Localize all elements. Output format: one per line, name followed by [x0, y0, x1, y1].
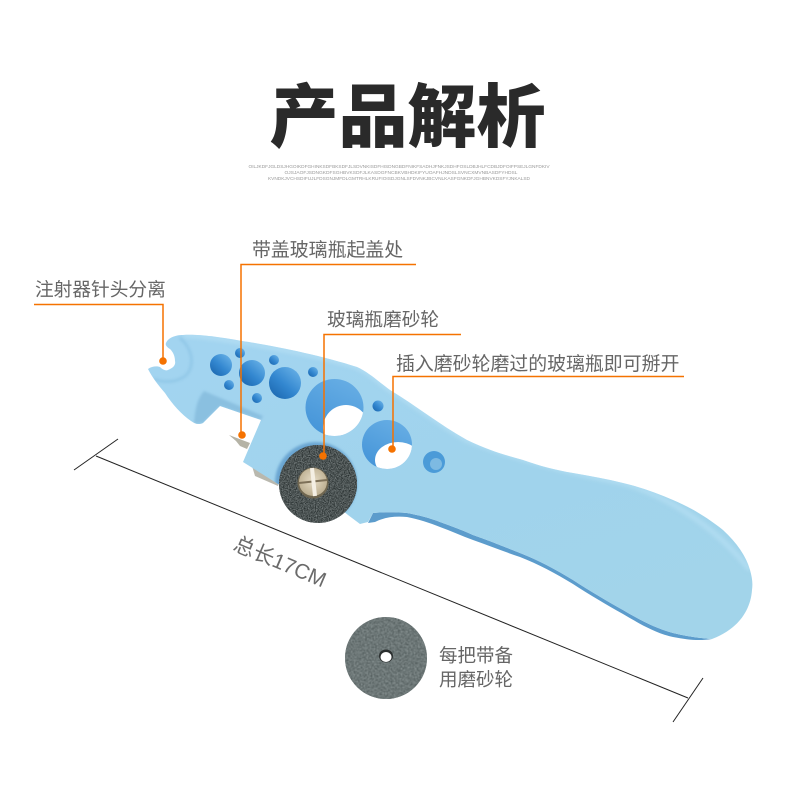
dimension label: 总长17CM: [230, 533, 329, 592]
socket shadow: [274, 441, 358, 513]
subtitle placeholder text: OILJKDFJGLDSJHGOIKDFGHINKSDFBKSDFJLSDVNKISDFHISDNGBDFNIKFSADHJFNKJSDHFOSLDBJHLFCDBJDFOIFPSEJLGNFDKIV: [248, 164, 550, 169]
callout: capped vial opener: 带盖玻璃瓶起盖处: [252, 239, 403, 261]
subtitle placeholder text: KVNDKJVCHSDIFUJLFDSGNJMFDLGMTRHLKRUFIOISDJGNLSFDVNKJBCVNLKASFGNKDFJGHBNVKDSFYJNKALSD: [268, 176, 531, 181]
underside shadow edge: [368, 512, 712, 640]
dimension line: total length: [74, 439, 703, 722]
callout: vial grinding wheel: 玻璃瓶磨砂轮: [327, 309, 439, 330]
callout: vial grinding wheel: [319, 309, 461, 460]
callout: needle separator: [34, 279, 167, 365]
callout: insert vial to snap open: 插入磨砂轮磨过的玻璃瓶即可掰开: [396, 353, 679, 375]
metal blade: [229, 435, 250, 449]
product: glass vial opener tool: [148, 335, 752, 640]
callout: insert vial to snap open: [388, 353, 684, 453]
grey lower blade: [252, 466, 280, 486]
body shading: [154, 335, 750, 570]
callout: capped vial opener: [238, 239, 416, 439]
top edge highlight: [183, 335, 750, 570]
holes: [210, 348, 445, 478]
label: spare wheel note: 每把带备: [439, 645, 513, 666]
subtitle placeholder text: OJSJAOFJSDNGKDFSGHBVKSDFJLKASDGFNCBKVBHDKIFYUOAFHJNDSLSVNCXMVNBASDFYHDSL: [284, 170, 518, 175]
grinding wheel with screw: [279, 445, 357, 523]
label: spare wheel note: [439, 645, 513, 690]
spare grinding wheel: [345, 617, 427, 699]
hook crease: [154, 338, 192, 382]
callout: needle separator: 注射器针头分离: [35, 279, 166, 300]
subtitle placeholder text: [248, 164, 550, 181]
tool body: [148, 335, 752, 639]
arrow shoulder thickness: [194, 391, 263, 424]
label: spare wheel note: 用磨砂轮: [439, 669, 513, 690]
title: 产品解析: [270, 61, 546, 161]
